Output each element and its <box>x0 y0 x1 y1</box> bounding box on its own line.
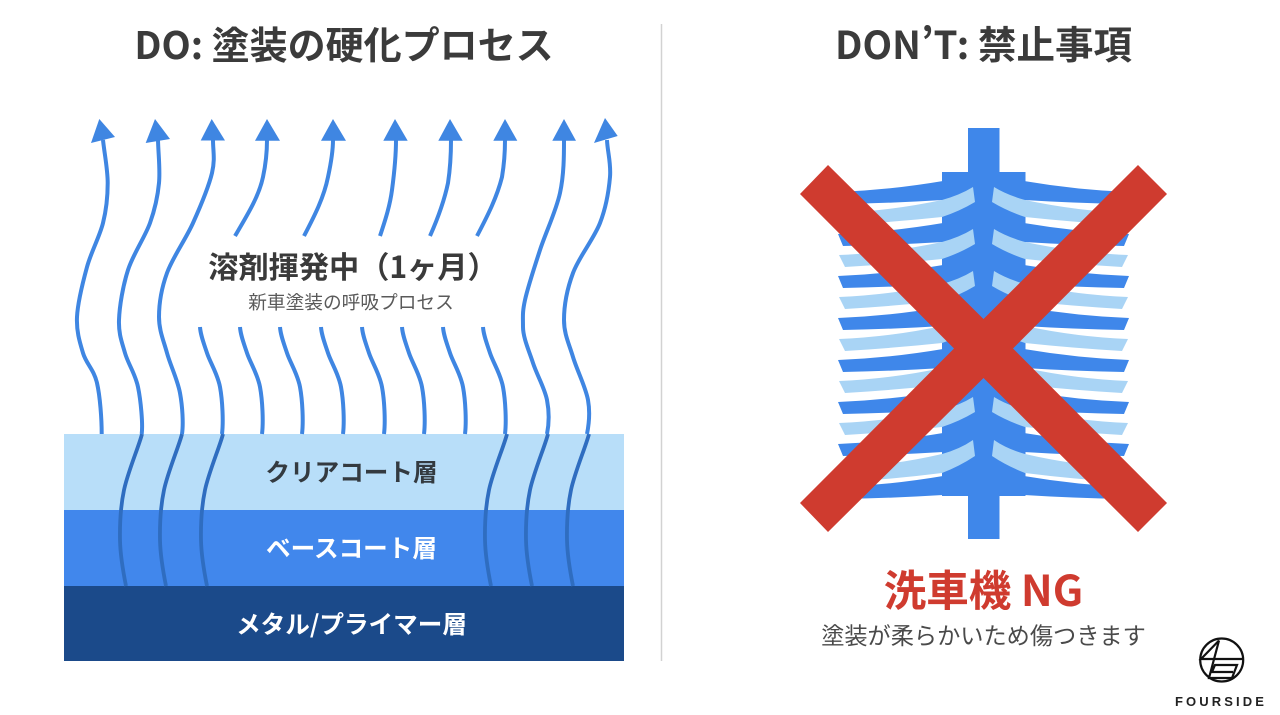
text: breathing process: 新車塗装の呼吸プロセス <box>248 288 454 315</box>
layer: metal primer <box>64 586 624 661</box>
chart: solvent lines inside the layers <box>120 434 589 586</box>
title: DON'T: DON’T: 禁止事項 <box>835 15 1132 71</box>
text: paint is soft: 塗装が柔らかいため傷つきます <box>821 617 1146 651</box>
icon: red X <box>800 165 1167 532</box>
chart: short upper arrows <box>235 140 505 236</box>
title: DO: DO: 塗装の硬化プロセス <box>134 15 554 70</box>
layer: base coat <box>64 510 624 586</box>
icon: FOURSIDE logo <box>1175 638 1267 709</box>
icon: arrowheads <box>91 118 618 143</box>
layer: clear coat: クリアコート層 <box>265 453 438 489</box>
icon: FOURSIDE logo: FOURSIDE <box>1175 694 1267 709</box>
ribs: left side <box>838 181 975 499</box>
layer: clear coat <box>64 434 624 510</box>
layer: base coat: ベースコート層 <box>266 529 437 565</box>
icon: crossed-out rib-like paint brush <box>838 128 1129 539</box>
ribs: right side <box>992 181 1129 499</box>
spine <box>942 128 1026 539</box>
heading: solvent evaporation: 溶剤揮発中（1ヶ月） <box>208 243 498 287</box>
layer: metal primer: メタル/プライマー層 <box>236 605 467 641</box>
heading: car wash NG: 洗車機 NG <box>884 558 1083 619</box>
chart: long evaporation arrows <box>77 140 610 434</box>
chart: short lower wavy lines <box>200 327 506 434</box>
panel: paint layers <box>64 434 624 661</box>
